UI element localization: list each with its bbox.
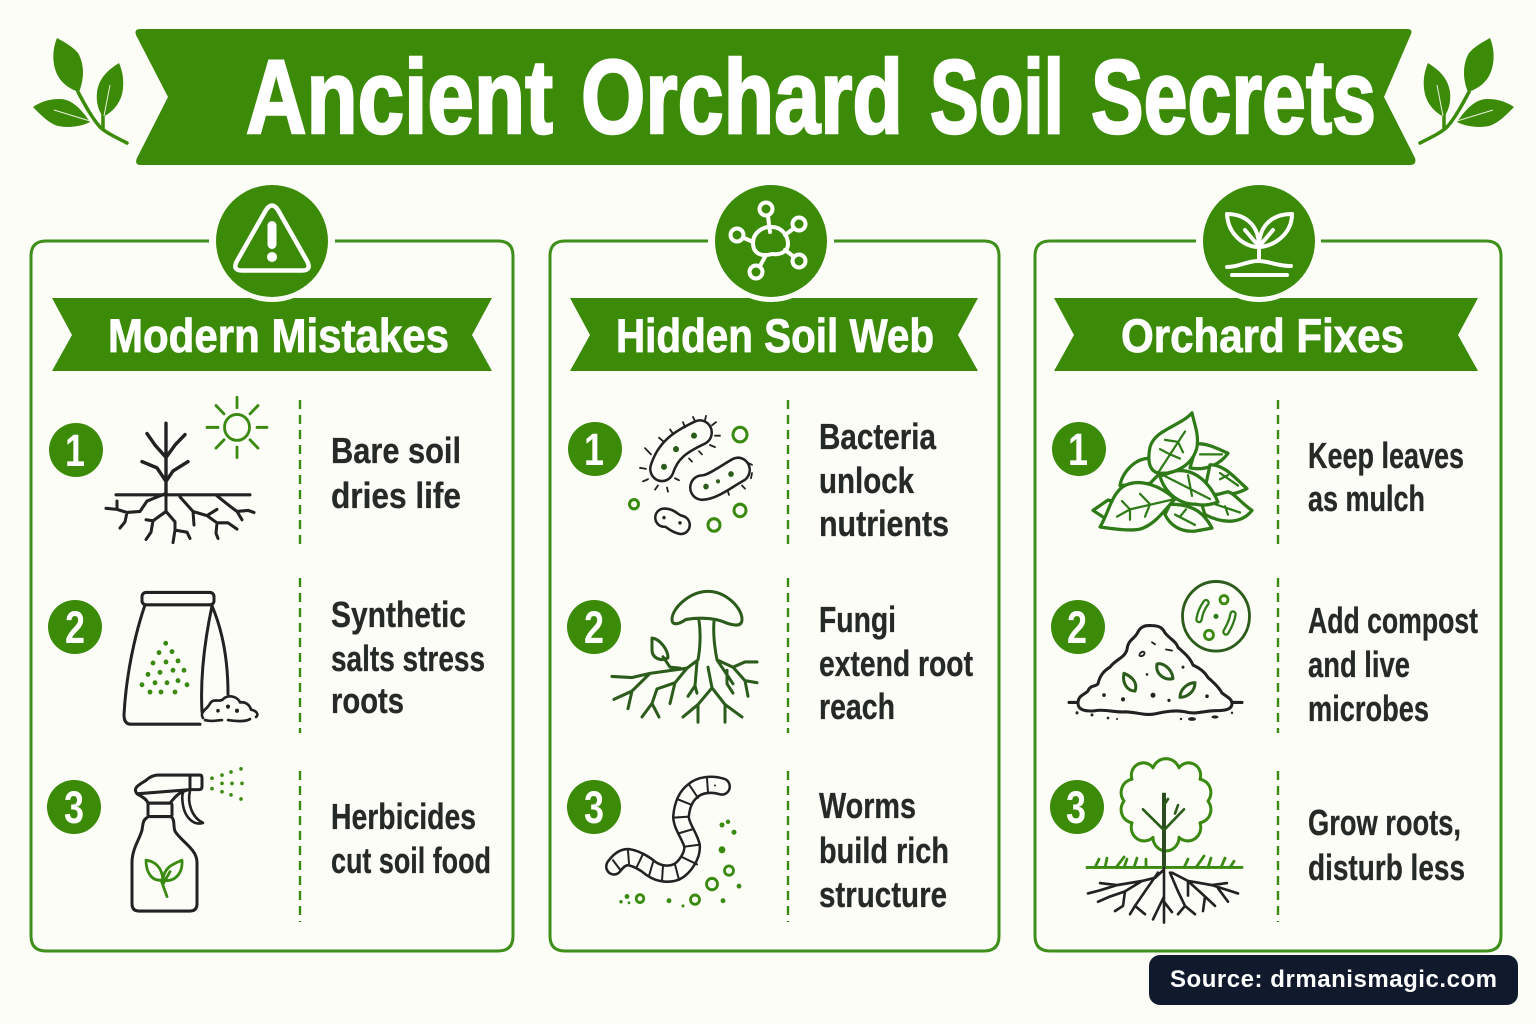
item 1: bacteria: 1: [584, 424, 604, 475]
item 1: bare soil: [49, 423, 461, 516]
item 2: fungi: 2: [584, 602, 604, 653]
item 1: bacteria: [568, 416, 949, 544]
item 1: leaves: [1052, 422, 1464, 519]
item text: roots: [331, 680, 404, 721]
item text: [331, 796, 491, 881]
item 2: fungi: [567, 599, 973, 727]
heading ribbon: hidden soil web: Hidden Soil Web: [616, 309, 934, 362]
item text: Keep leaves: [1308, 435, 1464, 476]
item text: Grow roots,: [1308, 802, 1461, 843]
icon: leaf pile: [1093, 413, 1252, 531]
icon: herbicide spray bottle: [132, 767, 244, 911]
item text: [331, 430, 461, 516]
icon: tree with roots: [1087, 759, 1242, 922]
heading ribbon: modern mistakes: [52, 298, 492, 371]
item text: Herbicides: [331, 796, 476, 837]
item text: [1308, 600, 1478, 729]
item 2: synthetic salts: [48, 594, 485, 721]
item 3: worms: [567, 780, 949, 915]
item 1: bare soil: 1: [65, 425, 85, 476]
heading ribbon: orchard fixes: [1054, 298, 1478, 371]
heading ribbon: orchard fixes: Orchard Fixes: [1121, 309, 1404, 362]
item text: [819, 416, 949, 544]
item text: [1308, 435, 1464, 519]
icon: mushroom and fungal roots: [612, 591, 757, 722]
item text: Add compost: [1308, 600, 1478, 641]
item text: nutrients: [819, 503, 949, 544]
title banner: [136, 29, 1415, 165]
item 3: worms: 3: [584, 782, 604, 833]
title: Secrets: [1091, 39, 1376, 156]
item text: reach: [819, 686, 895, 727]
item text: disturb less: [1308, 847, 1465, 888]
item text: extend root: [819, 643, 973, 684]
item text: salts stress: [331, 638, 485, 679]
source badge: [1149, 955, 1518, 1005]
item text: Worms: [819, 785, 916, 826]
icon: network badge: [710, 180, 832, 302]
item text: Synthetic: [331, 594, 466, 635]
item 3: herbicides: [47, 780, 491, 881]
item 3: roots: [1050, 780, 1465, 888]
heading ribbon: modern mistakes: Modern Mistakes: [108, 309, 449, 362]
item text: structure: [819, 874, 947, 915]
title: Ancient: [246, 39, 553, 156]
item text: Bare soil: [331, 430, 461, 471]
item text: [1308, 802, 1465, 888]
panel: hidden soil web: [550, 180, 999, 951]
item 1: leaves: 1: [1068, 424, 1088, 475]
item text: unlock: [819, 460, 915, 501]
item text: [819, 785, 949, 915]
icon: bare tree with sun: [106, 397, 267, 543]
title: [246, 39, 1376, 156]
item 3: roots: 3: [1066, 782, 1086, 833]
title: Soil: [930, 39, 1064, 156]
source badge: Source: drmanismagic.com: [1170, 966, 1497, 993]
item 2: synthetic salts: 2: [65, 602, 85, 653]
item 2: compost: [1051, 600, 1478, 729]
item text: build rich: [819, 830, 949, 871]
icon: right leaf sprig: [1420, 38, 1514, 143]
heading ribbon: hidden soil web: [570, 298, 978, 371]
item text: Fungi: [819, 599, 896, 640]
item text: microbes: [1308, 688, 1429, 729]
item text: as mulch: [1308, 478, 1425, 519]
title: Orchard: [581, 39, 903, 156]
icon: sprout badge: [1198, 180, 1320, 302]
item icons: [106, 397, 1252, 922]
icon: warning badge: [211, 180, 333, 302]
icon: bacteria: [630, 416, 752, 531]
icon: fertilizer bag: [124, 592, 257, 724]
item text: Bacteria: [819, 416, 937, 457]
item text: [819, 599, 973, 727]
item text: dries life: [331, 475, 461, 516]
item 3: herbicides: 3: [64, 782, 84, 833]
panel: orchard fixes: [1035, 180, 1501, 951]
item text: and live: [1308, 644, 1410, 685]
icon: left leaf sprig: [33, 38, 127, 143]
item text: [331, 594, 485, 721]
icon: earthworm: [613, 778, 741, 907]
icon: compost pile with microbes: [1069, 582, 1250, 721]
item 2: compost: 2: [1067, 602, 1087, 653]
item text: cut soil food: [331, 840, 491, 881]
panel: modern mistakes: [31, 180, 513, 951]
